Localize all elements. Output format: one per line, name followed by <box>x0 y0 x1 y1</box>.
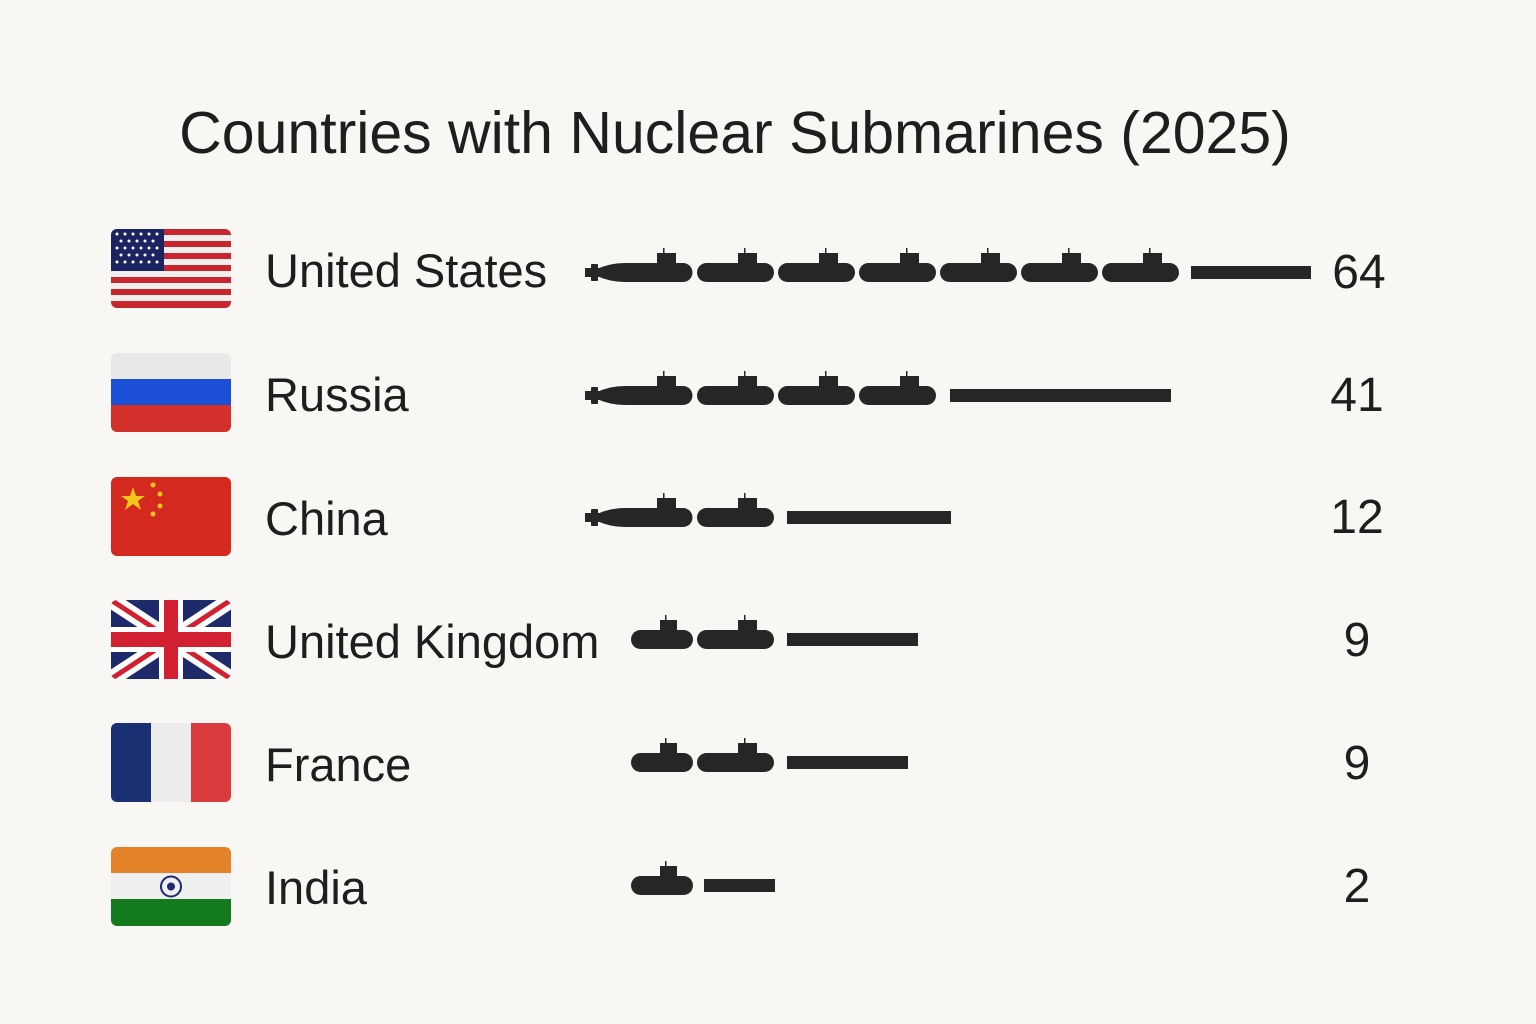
label: India: India <box>265 861 368 914</box>
row: Russia <box>111 353 1384 432</box>
pictogram bar: India <box>631 861 775 895</box>
title: Countries with Nuclear Submarines (2025) <box>179 100 1291 166</box>
pictogram bar: United States <box>585 248 1311 282</box>
flag: France <box>111 723 231 802</box>
row: India <box>111 847 1370 926</box>
row: United States <box>111 229 1386 308</box>
flag: United States <box>111 229 231 308</box>
row: France <box>111 723 1370 802</box>
pictogram bar: France <box>631 738 908 772</box>
label: United States: United States <box>265 244 547 297</box>
flag: China <box>111 477 231 556</box>
row: United Kingdom <box>111 600 1370 679</box>
row: China <box>111 477 1384 556</box>
pictogram bar: Russia <box>585 371 1171 405</box>
value: 9: 9 <box>1344 737 1370 790</box>
label: France: France <box>265 738 411 791</box>
value: 9: 9 <box>1344 614 1370 667</box>
value: 41: 41 <box>1330 369 1384 422</box>
flag: India <box>111 847 231 926</box>
label: United Kingdom: United Kingdom <box>265 615 599 668</box>
value: 64: 64 <box>1332 246 1386 299</box>
flag: United Kingdom <box>111 600 231 679</box>
label: Russia: Russia <box>265 368 410 421</box>
label: China: China <box>265 492 389 545</box>
value: 12: 12 <box>1330 491 1384 544</box>
pictogram bar: United Kingdom <box>631 615 918 649</box>
flag: Russia <box>111 353 231 432</box>
pictogram bar: China <box>585 493 951 527</box>
value: 2: 2 <box>1344 860 1370 913</box>
